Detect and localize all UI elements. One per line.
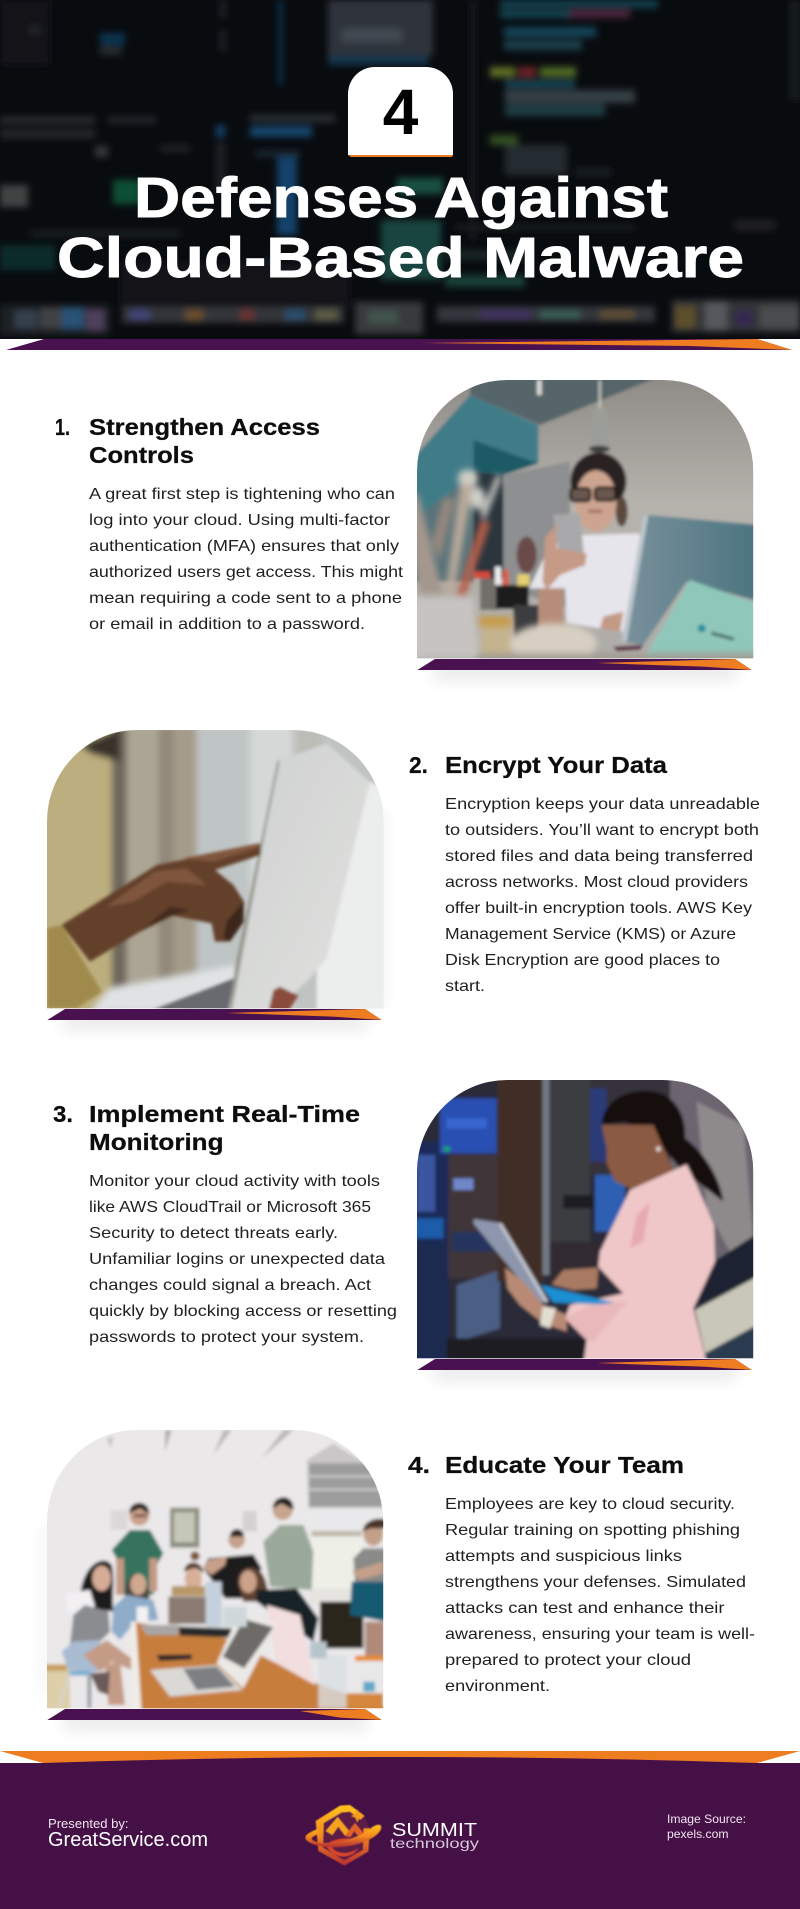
section 4 text [408,1452,755,1695]
section 3 text: Monitoring [89,1129,224,1155]
section 4 text: environment. [445,1678,550,1695]
section 1 text [55,414,404,633]
section 3 text: Security to detect threats early. [89,1225,338,1242]
section 2 text: Management Service (KMS) or Azure [445,926,736,943]
section 1 text: authorized users get access. This might [89,564,404,581]
section 4 text: Employees are key to cloud security. [445,1496,735,1513]
section 2 text: start. [445,978,485,995]
section 2 text: Disk Encryption are good places to [445,952,720,969]
section 3 text [53,1101,397,1346]
section 2 text: offer built-in encryption tools. AWS Key [445,900,752,917]
section 3 text: Unfamiliar logins or unexpected data [89,1251,385,1268]
image source: Image Source: [667,1812,746,1826]
footer ribbon [0,1751,800,1763]
section 3 text: quickly by blocking access or resetting [89,1303,397,1320]
icon: summit technology logo [305,1805,381,1866]
section 3 text: changes could signal a breach. Act [89,1277,372,1294]
title: Cloud-Based Malware [57,226,744,290]
title: Defenses Against [134,166,668,230]
section 2 text: stored files and data being transferred [445,848,753,865]
section 4 text: strengthens your defenses. Simulated [445,1574,746,1591]
section 1 text: Strengthen Access [89,414,320,440]
title [57,166,744,290]
section 3 text: Monitor your cloud activity with tools [89,1173,380,1190]
section 4 text: attacks can test and enhance their [445,1600,725,1617]
section 4 text: awareness, ensuring your team is well- [445,1626,755,1643]
photo 2: hand pointing at tablet [40,725,390,1030]
badge with number 4 [348,67,453,157]
header background photo [0,0,800,340]
presented by: Presented by: [48,1816,128,1831]
section 2 text: 2. [409,752,428,778]
presented by [48,1816,208,1851]
section 3 text: like AWS CloudTrail or Microsoft 365 [89,1199,371,1216]
section 1 text: or email in addition to a password. [89,616,365,633]
section 2 text [409,752,760,995]
image source [667,1812,746,1841]
image source: pexels.com [667,1827,728,1841]
brand name: technology [390,1835,479,1851]
photo 4: team around a table [40,1425,390,1730]
section 2 text: across networks. Most cloud providers [445,874,748,891]
section 4 text: 4. [408,1452,430,1478]
footer panel [0,1763,800,1909]
section 4 text: Educate Your Team [445,1452,684,1478]
section 3 text: Implement Real-Time [89,1101,360,1127]
section 4 text: Regular training on spotting phishing [445,1522,740,1539]
photo 1: woman with phone and laptop [410,375,760,680]
section 1 text: 1. [55,414,70,440]
section 2 text: Encrypt Your Data [445,752,667,778]
header ribbon [0,339,800,350]
presented by: GreatService.com [48,1829,208,1851]
section 2 text: to outsiders. You’ll want to encrypt both [445,822,759,839]
section 4 text: prepared to protect your cloud [445,1652,691,1669]
section 1 text: Controls [89,442,194,468]
section 1 text: A great first step is tightening who can [89,486,395,503]
section 1 text: log into your cloud. Using multi-factor [89,512,391,529]
photo 3: woman with tablet in server room [410,1075,760,1380]
section 4 text: attempts and suspicious links [445,1548,682,1565]
section 1 text: authentication (MFA) ensures that only [89,538,399,555]
section 3 text: 3. [53,1101,73,1127]
brand name: SUMMIT [392,1820,477,1840]
section 3 text: passwords to protect your system. [89,1329,364,1346]
brand name [390,1820,479,1851]
section 2 text: Encryption keeps your data unreadable [445,796,760,813]
badge with number 4: 4 [383,76,419,148]
section 1 text: mean requiring a code sent to a phone [89,590,402,607]
